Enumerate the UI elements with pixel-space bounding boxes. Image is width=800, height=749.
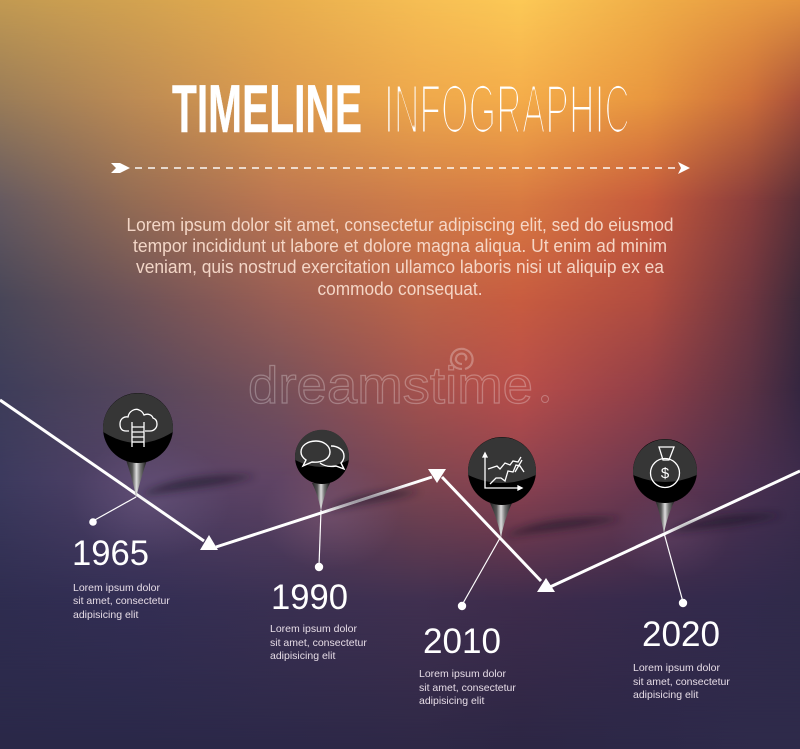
pin: 2020 [633, 439, 697, 534]
title: TIMELINE [172, 71, 362, 147]
title [172, 70, 630, 148]
entry: 2010: 2010 [423, 622, 501, 661]
entry: 1990: sit amet, consectetur [270, 637, 367, 649]
timeline arrowheads [200, 469, 555, 592]
entry: 1965: 1965 [72, 534, 149, 573]
timeline path [0, 400, 800, 587]
entry: 1990: adipisicing elit [270, 650, 335, 662]
intro text: commodo consequat. [318, 279, 482, 299]
entry: 1990: 1990 [271, 578, 348, 617]
entry: 2020 [633, 615, 730, 701]
entry: 2020: sit amet, consectetur [633, 676, 730, 688]
entry: 1990 [270, 578, 367, 662]
leader lines and dots [89, 497, 687, 610]
pin: 2010 [468, 437, 536, 538]
entry: 1965: Lorem ipsum dolor [73, 582, 160, 594]
entry: 2010: adipisicing elit [419, 695, 484, 707]
pin: 1990 [295, 430, 349, 511]
entry: 2020: 2020 [642, 615, 720, 654]
intro text: Lorem ipsum dolor sit amet, consectetur adipiscing elit, sed do eiusmod [126, 215, 674, 235]
entry: 2010 [419, 622, 516, 707]
entry: 2020: adipisicing elit [633, 689, 698, 701]
watermark: dreamstime [248, 357, 533, 415]
entry: 2010: sit amet, consectetur [419, 682, 516, 694]
icon: line chart [483, 453, 524, 490]
icon: money bag [650, 447, 680, 488]
pin: 1965 [103, 393, 173, 498]
intro text [126, 215, 674, 299]
entry: 1965: sit amet, consectetur [73, 595, 170, 607]
icon: speech bubbles [301, 441, 344, 469]
shadows of pins [140, 475, 782, 537]
intro text: veniam, quis nostrud exercitation ullamco laboris nisi ut aliquip ex ea [136, 257, 665, 277]
intro text: tempor incididunt ut labore et dolore magna aliqua. Ut enim ad minim [133, 236, 667, 256]
icon: dollar sign: $ [661, 465, 670, 482]
dashed arrow divider [111, 162, 690, 174]
icon: cloud and ladder [120, 409, 157, 447]
entry: 1990: Lorem ipsum dolor [270, 623, 357, 635]
entry: 1965: adipisicing elit [73, 609, 138, 621]
entry: 2010: Lorem ipsum dolor [419, 668, 506, 680]
entry: 1965 [72, 534, 170, 621]
entry: 2020: Lorem ipsum dolor [633, 662, 720, 674]
